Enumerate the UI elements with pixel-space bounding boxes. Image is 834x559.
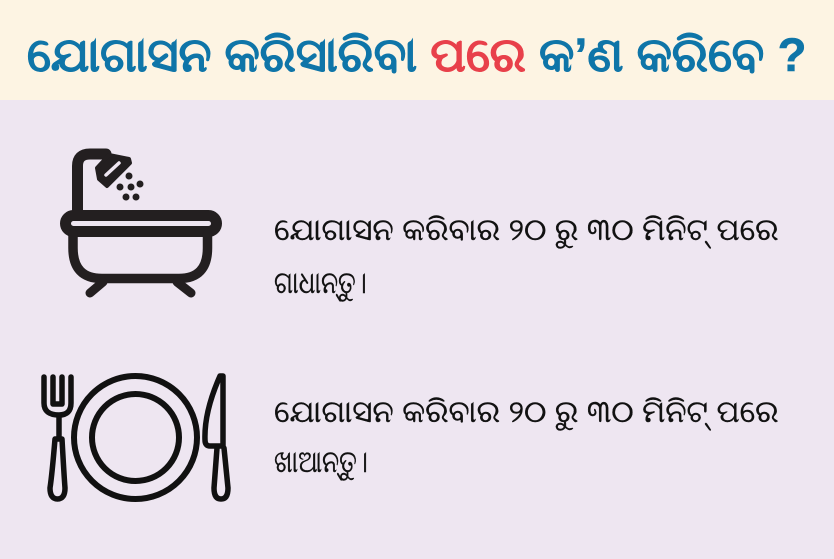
title banner: [0, 0, 834, 100]
text: eating advice: [274, 394, 779, 481]
icon: bathtub with shower: [60, 148, 222, 298]
text: bathing advice: ଗାଧାନ୍ତୁ।: [274, 265, 367, 300]
text: eating advice: ଯୋଗାସନ କରିବାର ୨୦ ରୁ ୩୦ ମିନିଟ୍ ପରେ: [274, 394, 779, 429]
icon: plate with fork and knife: [41, 373, 231, 502]
title: ଯୋଗାସନ କରିସାରିବା ପରେ କ’ଣ କରିବେ ?: [27, 29, 807, 82]
text: bathing advice: ଯୋଗାସନ କରିବାର ୨୦ ରୁ ୩୦ ମିନିଟ୍ ପରେ: [274, 212, 779, 247]
text: eating advice: ଖାଆନ୍ତୁ।: [274, 444, 368, 479]
text: bathing advice: [274, 212, 779, 302]
